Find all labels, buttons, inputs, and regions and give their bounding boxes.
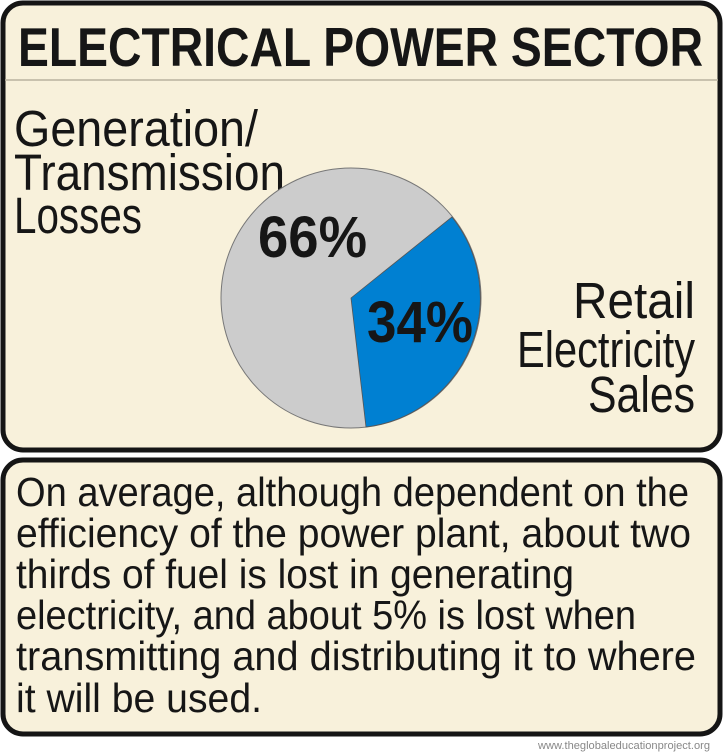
text block: transmitting and distributing it to where: [16, 633, 696, 679]
text block: efficiency of the power plant, about two: [16, 510, 691, 556]
text block: it will be used.: [16, 675, 262, 721]
label: retail sales: Retail: [573, 272, 695, 329]
pie chart: [221, 168, 481, 428]
panel: chart: [3, 3, 720, 450]
text block: On average, although dependent on the: [16, 469, 689, 515]
label: generation losses: Losses: [14, 187, 142, 244]
value: 66%: 66%: [258, 205, 367, 270]
value: 34%: 34%: [367, 290, 473, 355]
text block: electricity, and about 5% is lost when: [16, 592, 636, 638]
label: retail sales: [517, 272, 695, 423]
panel: explanation: [3, 460, 720, 734]
label: generation losses: [14, 100, 285, 244]
label: generation losses: Transmission: [14, 144, 285, 201]
label: generation losses: Generation/: [14, 100, 259, 157]
label: retail sales: Sales: [588, 366, 695, 423]
text block: thirds of fuel is lost in generating: [16, 551, 574, 597]
text block: [16, 469, 696, 721]
footer credit: www.theglobaleducationproject.org: [537, 740, 710, 752]
